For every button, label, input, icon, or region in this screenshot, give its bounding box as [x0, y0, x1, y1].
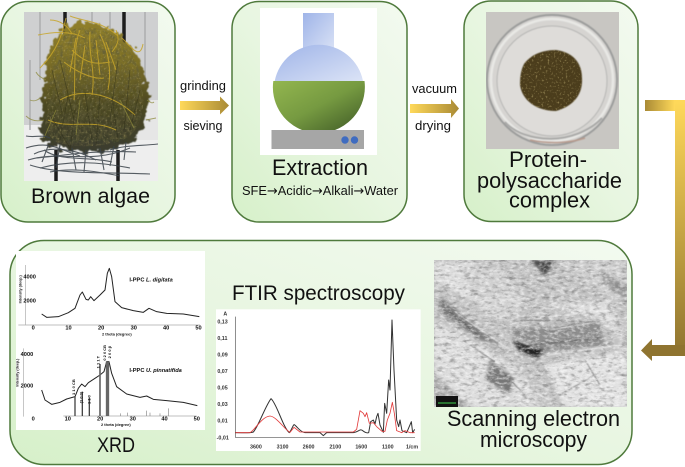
chart: XRD diffractograms: 50: [195, 326, 202, 332]
heading: FTIR spectroscopy: FTIR spectroscopy: [232, 281, 405, 305]
panel: protein-polysaccharide complex: [464, 1, 638, 222]
heading: Scanning electron microscopy: microscopy: [480, 427, 587, 452]
heading: XRD: XRD: [97, 434, 135, 457]
chart: XRD diffractograms: 1 1 0 CB: [71, 379, 76, 395]
label: extraction sequence: SFE→Acidic→Alkali→Water: [242, 183, 399, 199]
chart: FTIR spectra: 3100: [277, 444, 289, 450]
chart: FTIR spectra: 2100: [329, 444, 341, 450]
chart: XRD diffractograms: 2000: [21, 383, 33, 389]
chart: FTIR spectra: [216, 309, 421, 451]
chart: FTIR spectra: 0,05: [217, 386, 228, 392]
chart: XRD diffractograms: 10: [65, 326, 72, 332]
icon: extraction flask on heating plate: [260, 8, 377, 155]
photo: brown algae: [24, 12, 158, 181]
chart: XRD diffractograms: Intensity (deep.): [15, 358, 19, 387]
chart: FTIR spectra: 0,01: [217, 419, 228, 425]
chart: FTIR spectra: 0,11: [217, 336, 227, 342]
chart: XRD diffractograms: 40: [163, 326, 169, 332]
arrow label: drying: drying: [415, 118, 451, 133]
chart: FTIR spectra: -0,01: [217, 435, 229, 441]
label: complex name: [477, 147, 622, 212]
chart: XRD diffractograms: 50: [194, 416, 200, 422]
chart: FTIR spectra: 0,09: [217, 352, 228, 358]
chart: XRD diffractograms: (1 0 0): [79, 391, 84, 403]
chart: FTIR spectra: 2600: [303, 444, 315, 450]
chart: XRD diffractograms: I-PPC U. pinnatifida: [129, 368, 182, 374]
arrow: vacuum drying: [410, 99, 459, 118]
arrow label: sieving: sieving: [184, 118, 222, 133]
label: complex name: polysaccharide: [477, 168, 622, 193]
chart: FTIR spectra: 1100: [382, 444, 394, 450]
chart: XRD diffractograms: 20: [98, 326, 104, 332]
chart: XRD diffractograms: 4000: [21, 352, 33, 358]
chart: XRD diffractograms: 2000: [23, 298, 36, 304]
label: Brown algae: Brown algae: [31, 184, 150, 208]
chart: XRD diffractograms: 1 1 1 T: [95, 355, 100, 368]
panel: characterization: [10, 240, 632, 464]
label: complex name: Protein-: [509, 147, 587, 172]
chart: XRD diffractograms: 2 theta (degree): [101, 422, 131, 427]
chart: FTIR spectra: 1600: [355, 444, 367, 450]
arrow label: vacuum: vacuum: [412, 81, 457, 96]
panel: extraction: [232, 2, 407, 222]
chart: XRD diffractograms: [15, 251, 205, 430]
chart: XRD diffractograms: 2 theta (degree): [102, 331, 132, 336]
chart: XRD diffractograms: I-PPC L. digitata: [129, 277, 173, 283]
chart: FTIR spectra: 0,03: [217, 402, 228, 408]
chart: XRD diffractograms: 10: [65, 416, 71, 422]
chart: XRD diffractograms: 20: [97, 416, 103, 422]
label: Extraction: Extraction: [272, 155, 368, 180]
photo: scanning electron micrograph: [434, 260, 627, 407]
arrow label: grinding: grinding: [180, 78, 226, 93]
chart: XRD diffractograms: 0: [32, 416, 35, 422]
chart: XRD diffractograms: Intensity (deep.): [18, 275, 22, 303]
chart: XRD diffractograms: 0 2 0 CB: [102, 345, 107, 361]
scale bar: [436, 396, 458, 407]
label: complex name: complex: [509, 188, 590, 212]
chart: XRD diffractograms: 30: [130, 416, 136, 422]
chart: XRD diffractograms: 2 0 0 β: [107, 345, 112, 358]
heading: Scanning electron microscopy: Scanning electron: [447, 406, 620, 431]
chart: FTIR spectra: 0,13: [217, 320, 228, 326]
chart: FTIR spectra: A: [223, 311, 227, 317]
chart: XRD diffractograms: 0: [32, 326, 35, 332]
chart: FTIR spectra: 3600: [250, 444, 262, 450]
panel: brown algae: [1, 2, 175, 222]
chart: XRD diffractograms: 30: [131, 326, 137, 332]
arrow: complex to characterization: [641, 100, 685, 361]
chart: FTIR spectra: 1/cm: [406, 444, 418, 450]
chart: XRD diffractograms: 1 1 0: [87, 394, 92, 404]
chart: FTIR spectra: 0,07: [217, 369, 228, 375]
heading: Scanning electron microscopy: [447, 406, 620, 452]
chart: XRD diffractograms: 4000: [23, 274, 36, 280]
photo: petri dish with powder: [486, 12, 619, 149]
chart: XRD diffractograms: 40: [161, 416, 168, 422]
arrow: grinding and sieving: [180, 96, 229, 114]
